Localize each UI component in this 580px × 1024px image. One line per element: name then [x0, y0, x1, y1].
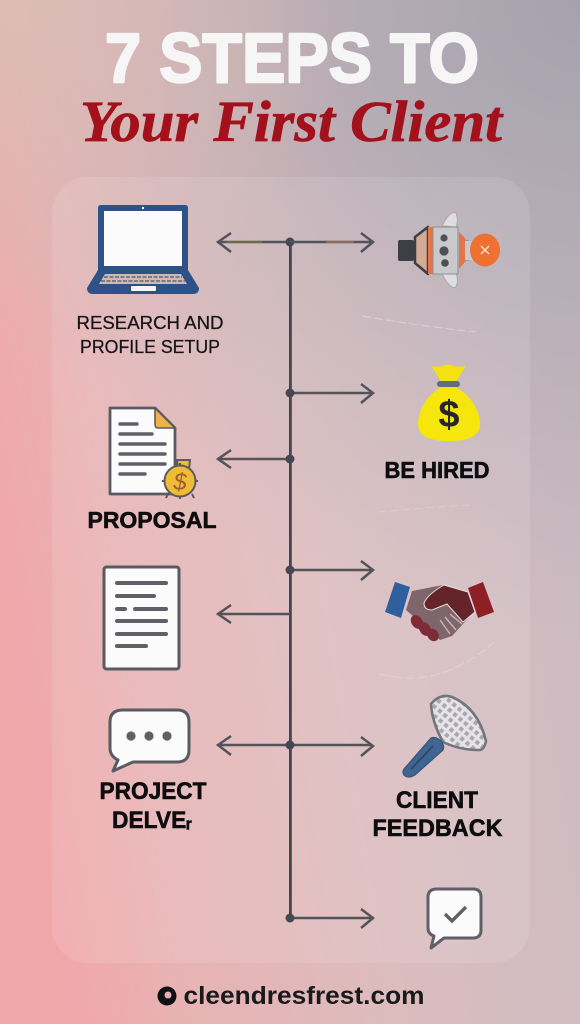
label: project delivery: PROJECT: [100, 778, 207, 805]
arrow: step 3 left: [218, 450, 294, 468]
title line 2: Your First Client: Your First Client: [80, 89, 504, 154]
label: research and profile setup: [76, 312, 224, 357]
icon: rocket gadget: [398, 213, 500, 287]
arrow: step 1 left: [218, 233, 294, 252]
arrow: step 5 left: [218, 605, 290, 623]
icon: handshake: [385, 582, 494, 643]
icon: document: [104, 567, 179, 669]
label: project delivery: [100, 778, 207, 834]
title line 1: 7 STEPS TO: 7 STEPS TO: [105, 19, 479, 97]
arrow: step 1 right: [290, 233, 373, 252]
icon: money bag: [418, 364, 480, 441]
faint dashed stroke: [378, 505, 470, 512]
faint dashed stroke: [362, 316, 476, 332]
footer text: cleendresfrest.com: [184, 982, 424, 1010]
arrow: step 2 right: [286, 384, 373, 403]
icon: check speech bubble: [428, 889, 481, 948]
label: research and profile setup: RESEARCH AND: [76, 312, 224, 333]
icon: proposal document: [110, 408, 198, 499]
label: be hired: BE HIRED: [384, 457, 490, 483]
icon: money bag: $: [438, 394, 460, 436]
arrow: step 4 right: [286, 561, 373, 580]
arrow: step 6 both ways: [218, 736, 373, 756]
timeline spine: [289, 242, 292, 918]
icon: laptop: [87, 205, 199, 294]
icon: proposal document: $: [172, 469, 187, 496]
panel: timeline card: [52, 177, 530, 963]
label: project delivery: DELVEᵣ: [112, 807, 192, 834]
icon: magnifier racket: [403, 696, 486, 777]
label: client feedback: FEEDBACK: [372, 815, 503, 842]
label: client feedback: [372, 787, 503, 842]
label: research and profile setup: PROFILE SETUP: [80, 336, 220, 357]
faint curved dashed stroke: [379, 642, 494, 678]
icon: footer logo: [158, 986, 176, 1006]
icon: speech bubble with dots: [110, 710, 189, 771]
arrow: step 7 right: [286, 909, 373, 928]
title: [80, 19, 504, 154]
label: proposal: PROPOSAL: [88, 507, 216, 533]
label: client feedback: CLIENT: [396, 787, 478, 814]
footer url: [158, 982, 424, 1010]
